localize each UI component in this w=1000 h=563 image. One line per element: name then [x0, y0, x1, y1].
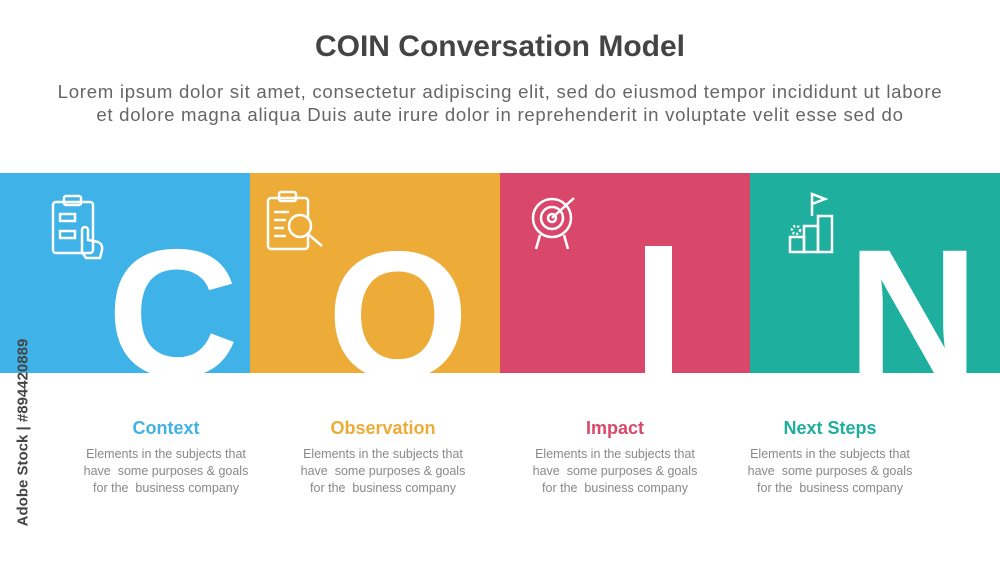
label: Observation: Observation: [330, 418, 436, 438]
desc: Next Steps: for the business company: [757, 481, 903, 495]
desc: Context: Elements in the subjects that: [86, 447, 246, 461]
label: Context: Context: [132, 418, 200, 438]
desc: Impact: Elements in the subjects that: [535, 447, 695, 461]
title: COIN Conversation Model: [315, 30, 685, 63]
desc: Impact: have some purposes & goals: [533, 464, 697, 478]
label: Next Steps: Next Steps: [783, 418, 877, 438]
panel: N: [750, 173, 1000, 373]
icon: target: [533, 198, 574, 249]
icon: clipboard magnifier: [268, 192, 322, 249]
desc: Observation: [301, 447, 465, 495]
desc: Next Steps: [748, 447, 912, 495]
desc: Next Steps: have some purposes & goals: [748, 464, 912, 478]
subtitle: et dolore magna aliqua Duis aute irure dolor in reprehenderit in voluptate velit esse sed do: [96, 104, 904, 125]
desc: Observation: for the business company: [310, 481, 456, 495]
desc: Observation: have some purposes & goals: [301, 464, 465, 478]
desc: Context: [84, 447, 248, 495]
icon: clipboard hand: [53, 196, 102, 258]
panel: I: [500, 173, 750, 376]
watermark text: Adobe Stock | #894420889: [14, 339, 32, 526]
desc: Impact: for the business company: [542, 481, 688, 495]
panel: C: [0, 173, 250, 373]
icon: podium flag: [790, 194, 832, 252]
desc: Context: for the business company: [93, 481, 239, 495]
label: Impact: Impact: [586, 418, 644, 438]
desc: Next Steps: Elements in the subjects that: [750, 447, 910, 461]
desc: Context: have some purposes & goals: [84, 464, 248, 478]
subtitle: Lorem ipsum dolor sit amet, consectetur adipiscing elit, sed do eiusmod tempor incididunt ut labore: [58, 81, 942, 102]
subtitle: [58, 81, 942, 125]
desc: Impact: [533, 447, 697, 495]
desc: Observation: Elements in the subjects that: [303, 447, 463, 461]
panel: O: [250, 173, 500, 373]
color band with letters: [0, 173, 1000, 373]
